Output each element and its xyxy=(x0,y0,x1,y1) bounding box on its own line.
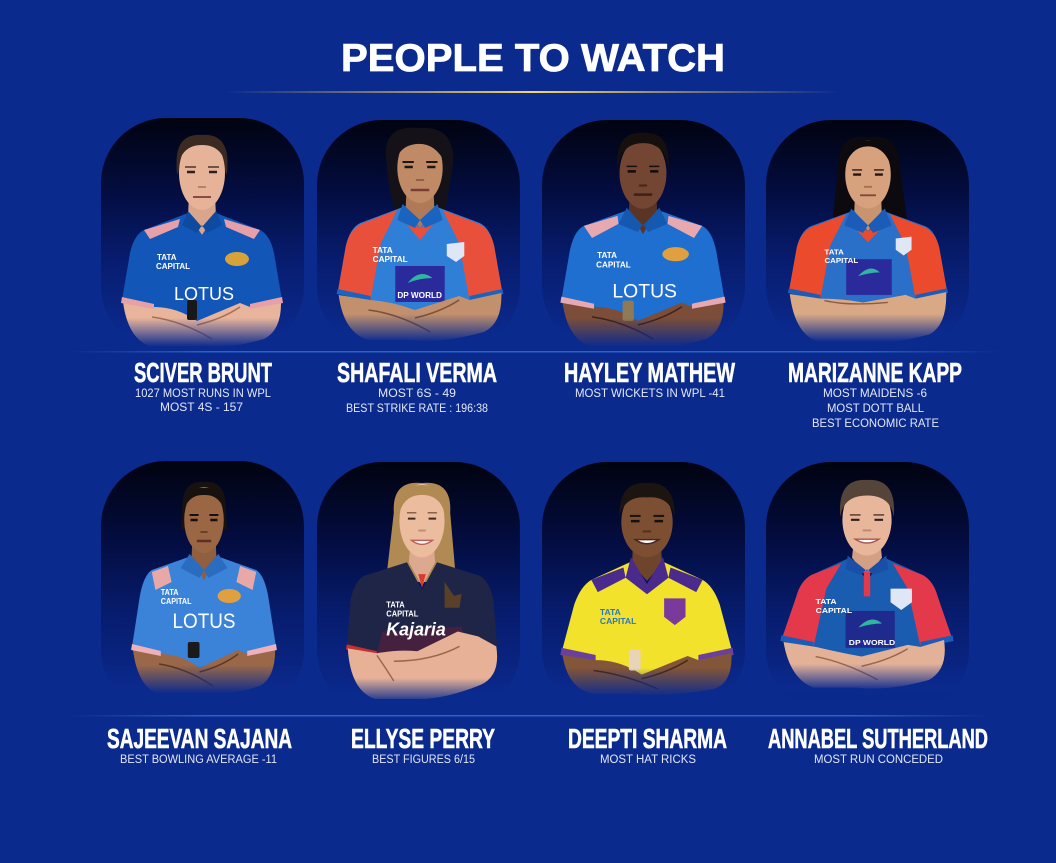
portrait: Hayley Mathew: CAPITAL xyxy=(596,260,631,269)
stats: BEST FIGURES 6/15 xyxy=(372,754,475,766)
stats: MOST 4S - 157 xyxy=(160,402,243,414)
stats: BEST STRIKE RATE : 196:38 xyxy=(346,403,488,415)
separator row 1 xyxy=(70,351,1000,352)
portrait: Ellyse Perry xyxy=(346,483,497,699)
card: Shafali Verma xyxy=(317,120,520,415)
card background xyxy=(317,462,520,715)
card: Marizanne Kapp xyxy=(766,120,969,430)
title: PEOPLE TO WATCH xyxy=(341,37,725,80)
portrait: Sajeevan Sajana: CAPITAL xyxy=(161,597,192,606)
stats: MOST DOTT BALL xyxy=(827,403,925,415)
card: Annabel Sutherland xyxy=(766,462,988,766)
portrait: Sciver Brunt: TATA xyxy=(157,253,177,262)
portrait: Sciver Brunt xyxy=(121,135,283,348)
portrait: Marizanne Kapp: CAPITAL xyxy=(824,256,858,265)
fade xyxy=(317,678,520,706)
portrait: Annabel Sutherland: CAPITAL xyxy=(816,606,852,615)
portrait: Shafali Verma: CAPITAL xyxy=(373,255,408,264)
name: SCIVER BRUNT xyxy=(134,357,272,388)
portrait: Ellyse Perry: TATA xyxy=(386,601,405,610)
name: MARIZANNE KAPP xyxy=(788,357,962,388)
portrait: Hayley Mathew: TATA xyxy=(597,251,617,260)
card: Sciver Brunt xyxy=(101,118,304,414)
fade xyxy=(101,665,304,697)
title underline xyxy=(225,91,840,93)
name: SAJEEVAN SAJANA xyxy=(107,723,292,754)
portrait: Sajeevan Sajana: LOTUS xyxy=(172,610,235,633)
portrait: Marizanne Kapp xyxy=(788,137,948,343)
stats xyxy=(812,388,939,430)
portrait: Hayley Mathew xyxy=(560,133,726,348)
name: HAYLEY MATHEW xyxy=(564,357,735,388)
portrait: Marizanne Kapp: TATA xyxy=(824,248,844,256)
portrait: Shafali Verma: DP WORLD xyxy=(397,291,442,300)
fade xyxy=(542,668,745,700)
portrait: Sciver Brunt: LOTUS xyxy=(174,284,234,304)
portrait: Deepti Sharma: CAPITAL xyxy=(600,616,636,626)
fade xyxy=(317,314,520,345)
portrait: Ellyse Perry: Kajaria xyxy=(386,618,446,640)
portrait: Sciver Brunt: CAPITAL xyxy=(156,262,190,271)
stats: MOST WICKETS IN WPL -41 xyxy=(575,388,725,400)
portrait: Hayley Mathew: LOTUS xyxy=(612,282,677,303)
card: Deepti Sharma xyxy=(542,462,745,766)
card background xyxy=(317,120,520,351)
separator row 2 xyxy=(70,715,990,716)
portrait: Annabel Sutherland: DP WORLD xyxy=(849,638,895,647)
stats: MOST 6S - 49 xyxy=(378,388,456,400)
stats: MOST RUN CONCEDED xyxy=(814,754,943,766)
fade xyxy=(766,314,969,345)
portrait: Ellyse Perry: CAPITAL xyxy=(386,609,419,619)
card: Hayley Mathew xyxy=(542,120,745,400)
portrait: Shafali Verma xyxy=(337,128,503,341)
card: Sajeevan Sajana xyxy=(101,461,304,766)
card: Ellyse Perry xyxy=(317,462,520,766)
card background xyxy=(101,461,304,715)
card background xyxy=(766,462,969,715)
fade xyxy=(542,318,745,350)
card background xyxy=(542,120,745,351)
stats xyxy=(135,388,272,414)
stats xyxy=(346,388,488,415)
stats: BEST BOWLING AVERAGE -11 xyxy=(120,754,277,766)
portrait: Annabel Sutherland xyxy=(780,480,954,689)
fade xyxy=(101,318,304,350)
stats: BEST ECONOMIC RATE xyxy=(812,418,939,430)
name: DEEPTI SHARMA xyxy=(568,723,727,754)
name: ELLYSE PERRY xyxy=(351,723,495,754)
card background xyxy=(542,462,745,715)
portrait: Sajeevan Sajana: TATA xyxy=(161,588,179,597)
portrait: Sajeevan Sajana xyxy=(131,482,277,695)
name: SHAFALI VERMA xyxy=(337,357,497,388)
card background xyxy=(101,118,304,351)
portrait: Deepti Sharma xyxy=(560,483,734,695)
card background xyxy=(766,120,969,351)
fade xyxy=(766,664,969,694)
stats: MOST HAT RICKS xyxy=(600,754,696,766)
portrait: Shafali Verma: TATA xyxy=(373,246,393,255)
stats: 1027 MOST RUNS IN WPL xyxy=(135,388,272,400)
portrait: Deepti Sharma: TATA xyxy=(600,607,621,617)
stats: MOST MAIDENS -6 xyxy=(823,388,927,400)
portrait: Annabel Sutherland: TATA xyxy=(816,598,837,606)
